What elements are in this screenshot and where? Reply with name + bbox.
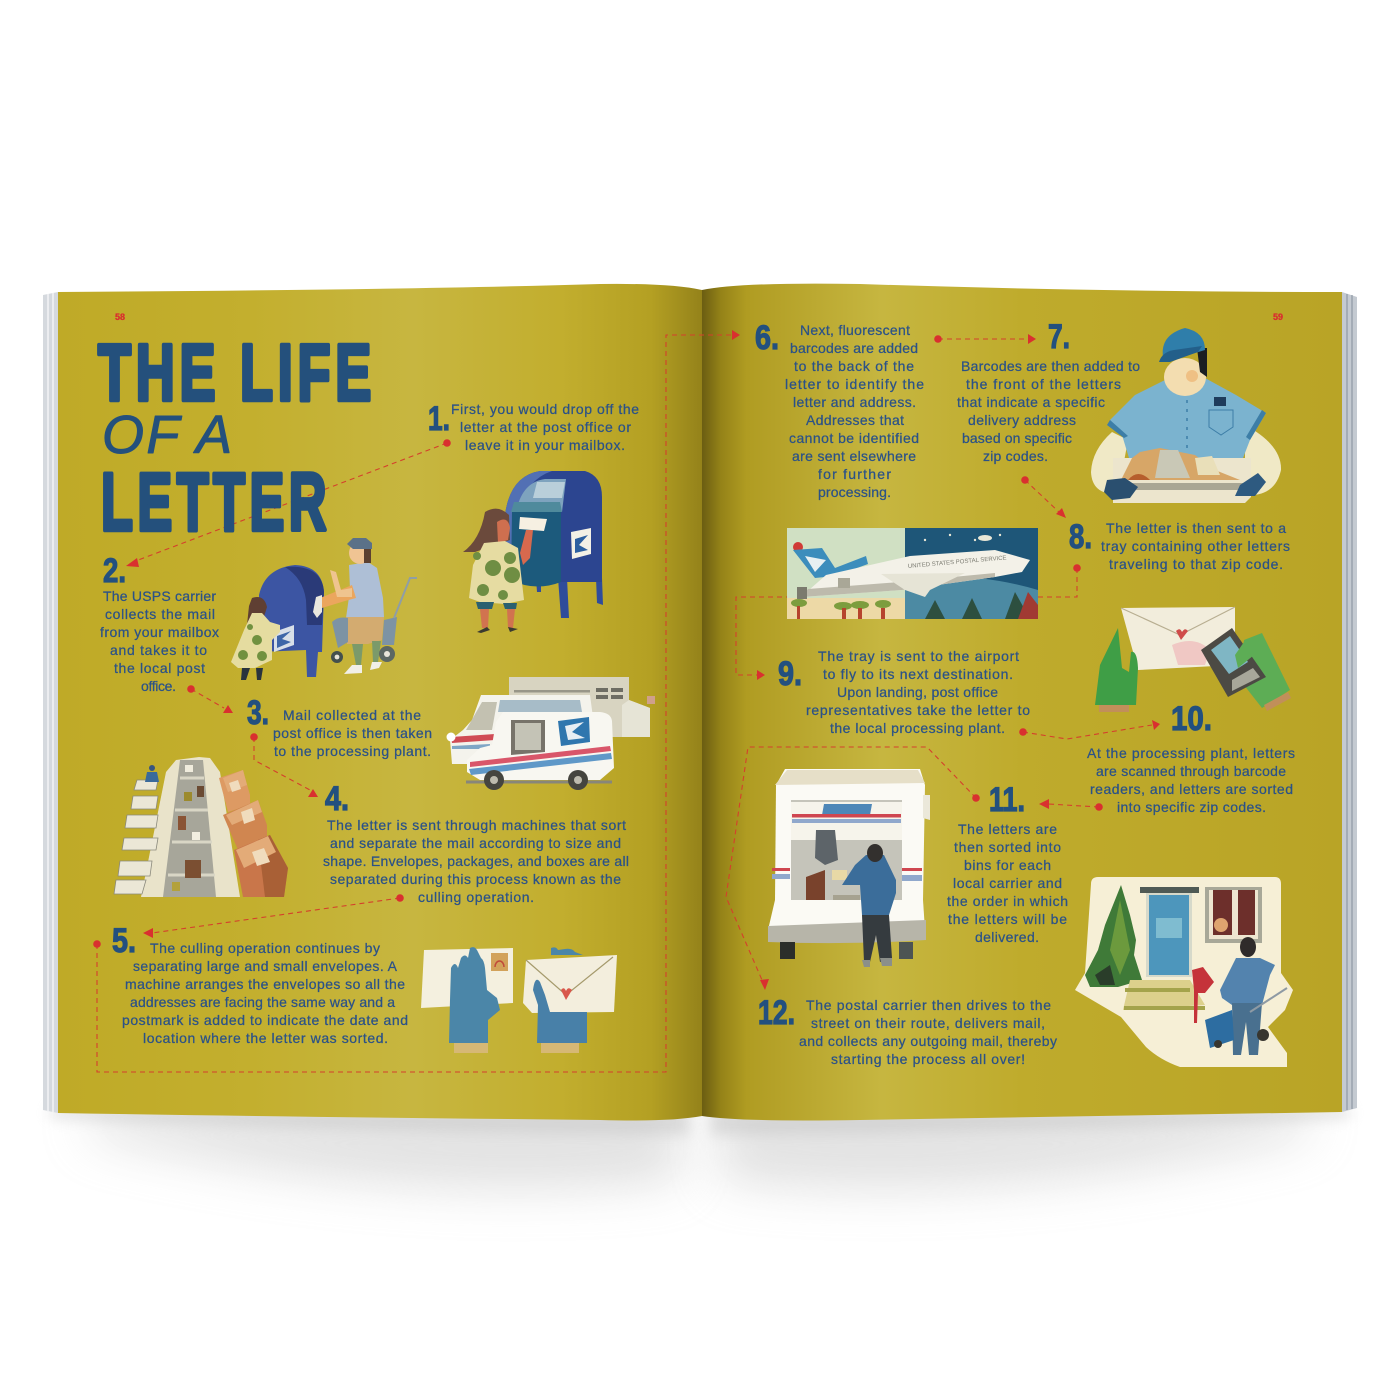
illustration: postal trucks and processing building [446, 677, 655, 790]
step 12 text: street on their route, delivers mail, [811, 1015, 1045, 1031]
step 7 text: that indicate a specific [957, 394, 1105, 410]
step 9 text: to fly to its next destination. [823, 666, 1013, 682]
illustration: postal worker holding mail tray [1091, 328, 1281, 503]
step 1 text: 1. [428, 400, 450, 438]
step 3 text: post office is then taken [273, 725, 432, 741]
page number 59: 59 [1273, 312, 1283, 322]
step 1 text: First, you would drop off the [451, 401, 639, 417]
step 7 text: Barcodes are then added to [961, 358, 1140, 374]
step 9 text: The tray is sent to the airport [818, 648, 1019, 664]
illustration: girl posting letter at blue mailbox [463, 471, 603, 633]
step 6 text: Addresses that [806, 412, 904, 428]
step 6 text: for further [818, 466, 891, 482]
step 10 text: into specific zip codes. [1117, 799, 1266, 815]
step 4 text: 4. [325, 780, 349, 818]
step 7 text: 7. [1048, 318, 1070, 356]
step 4 text: shape. Envelopes, packages, and boxes are all [323, 853, 629, 869]
book shadow [50, 1108, 1350, 1189]
step 2 text: from your mailbox [100, 624, 219, 640]
step 12 text: starting the process all over! [831, 1051, 1025, 1067]
step 5 text: location where the letter was sorted. [143, 1030, 388, 1046]
step 1 text: letter at the post office or [460, 419, 631, 435]
step 7 text [957, 318, 1140, 464]
right page [702, 284, 1342, 1121]
illustration: mail sorting machine and boxes [114, 757, 288, 897]
step 8 text [1069, 518, 1290, 572]
step 1 text: leave it in your mailbox. [465, 437, 625, 453]
step 10 text: At the processing plant, letters [1087, 745, 1295, 761]
step 2 text: and takes it to [110, 642, 207, 658]
step 6 text: letter and address. [793, 394, 916, 410]
step 11 text: local carrier and [953, 875, 1062, 891]
illustration: mail airplane panel: UNITED STATES POSTAL SERVICE [908, 555, 1007, 570]
left page [58, 284, 702, 1120]
step 5 text: addresses are facing the same way and a [130, 994, 395, 1010]
step 11 text: 11. [989, 781, 1025, 819]
step 6 text: processing. [818, 484, 891, 500]
step 10 text [1087, 700, 1295, 815]
step 5 text: machine arranges the envelopes so all the [125, 976, 405, 992]
step 2 text: collects the mail [105, 606, 215, 622]
step 4 text: The letter is sent through machines that sort [327, 817, 626, 833]
step 9 text: Upon landing, post office [837, 684, 998, 700]
step 4 text [323, 780, 629, 905]
illustration: mail airplane panel [787, 528, 1038, 619]
step 7 text: the front of the letters [966, 376, 1121, 392]
step 9 text [778, 648, 1030, 736]
step 2 text: 2. [103, 552, 126, 590]
dashed route connectors [93, 330, 1160, 1072]
step 6 text: letter to identify the [785, 376, 924, 392]
step 8 text: 8. [1069, 518, 1092, 556]
step 2 text: The USPS carrier [103, 588, 216, 604]
step 5 text: separating large and small envelopes. A [133, 958, 398, 974]
step 10 text: readers, and letters are sorted [1090, 781, 1293, 797]
page block edges [43, 292, 1357, 1113]
step 9 text: representatives take the letter to [806, 702, 1030, 718]
step 7 text: zip codes. [983, 448, 1048, 464]
step 5 text: 5. [112, 922, 136, 960]
illustration: envelope and barcode scanner with green gloves [1095, 607, 1291, 712]
step 11 text: delivered. [975, 929, 1039, 945]
step 6 text: barcodes are added [790, 340, 918, 356]
step 6 text: cannot be identified [789, 430, 919, 446]
step 2 text: office. [141, 678, 176, 694]
illustration: postal truck rear with carrier loading [768, 769, 930, 967]
illustration: carrier collecting mail with child and cart [231, 538, 417, 680]
step 12 text [758, 994, 1057, 1067]
step 5 text: postmark is added to indicate the date and [122, 1012, 408, 1028]
step 9 text: the local processing plant. [830, 720, 1005, 736]
step 11 text: bins for each [964, 857, 1051, 873]
step 10 text: 10. [1171, 700, 1212, 738]
step 8 text: The letter is then sent to a [1106, 520, 1286, 536]
step 4 text: and separate the mail according to size and [330, 835, 621, 851]
title: THE LIFE [98, 328, 376, 417]
step 12 text: The postal carrier then drives to the [806, 997, 1051, 1013]
step 8 text: tray containing other letters [1101, 538, 1290, 554]
step 6 text: 6. [755, 319, 779, 357]
step 3 text: Mail collected at the [283, 707, 421, 723]
step 1 text [428, 400, 639, 453]
step 3 text: to the processing plant. [274, 743, 431, 759]
step 6 text [755, 319, 924, 500]
step 6 text: Next, fluorescent [800, 322, 910, 338]
step 7 text: delivery address [968, 412, 1076, 428]
title: LETTER [101, 457, 331, 548]
step 3 text [247, 694, 432, 759]
step 11 text: then sorted into [954, 839, 1061, 855]
step 8 text: traveling to that zip code. [1109, 556, 1283, 572]
page number 58: 58 [115, 312, 125, 322]
title [98, 328, 376, 548]
step 5 text [112, 922, 408, 1046]
step 2 text: the local post [114, 660, 205, 676]
step 7 text: based on specific [962, 430, 1072, 446]
illustration: house with carrier delivering mail [1075, 877, 1293, 1067]
step 6 text: to the back of the [794, 358, 914, 374]
step 12 text: and collects any outgoing mail, thereby [799, 1033, 1057, 1049]
step 2 text [100, 552, 219, 694]
step 5 text: The culling operation continues by [150, 940, 380, 956]
step 12 text: 12. [758, 994, 795, 1032]
step 4 text: separated during this process known as the [330, 871, 621, 887]
title: OF A [102, 405, 232, 465]
step 3 text: 3. [247, 694, 269, 732]
step 11 text: the order in which [947, 893, 1068, 909]
step 10 text: are scanned through barcode [1096, 763, 1286, 779]
step 4 text: culling operation. [418, 889, 534, 905]
step 6 text: are sent elsewhere [792, 448, 916, 464]
illustration: gloved hands holding envelopes [421, 947, 617, 1053]
step 11 text [947, 781, 1068, 945]
step 11 text: The letters are [958, 821, 1057, 837]
step 9 text: 9. [778, 655, 802, 693]
step 11 text: the letters will be [948, 911, 1067, 927]
